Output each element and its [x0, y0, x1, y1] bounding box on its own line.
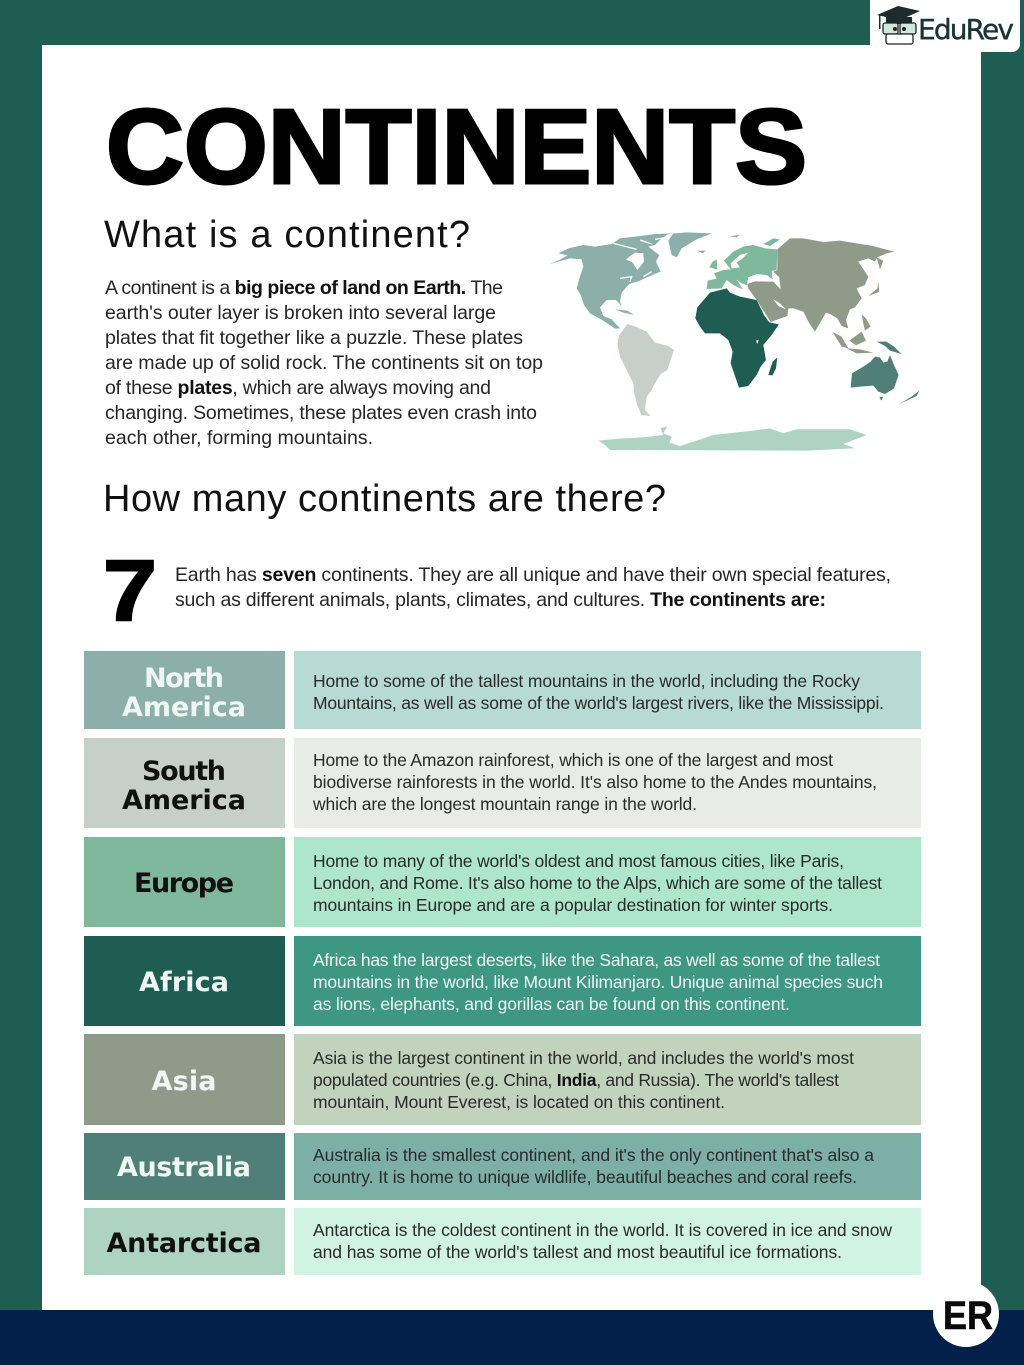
- logo: EduRev: [870, 0, 1020, 52]
- north america: [549, 232, 712, 329]
- row: North America: North: [144, 663, 224, 694]
- text block: seven continents intro: Earth has seven continents. They are all unique and have their own special features,: [175, 564, 891, 586]
- text block: seven continents intro: such as different animals, plants, climates, and cultures. The continents are:: [175, 589, 826, 611]
- row: Europe: mountains in Europe and are a popular destination for winter sports.: [313, 895, 833, 915]
- row: Australia: [84, 1133, 921, 1200]
- row: Africa: Africa has the largest deserts, like the Sahara, as well as some of the tallest: [313, 950, 880, 970]
- row: Europe: Home to many of the world's oldest and most famous cities, like Paris,: [313, 851, 844, 871]
- title: CONTINENTS: [106, 88, 807, 206]
- text block: continent definition: plates that fit together like a puzzle. These plates: [105, 327, 523, 349]
- world map: [549, 232, 919, 451]
- row: South America: biodiverse rainforests in the world. It's also home to the Andes mountains,: [313, 772, 877, 792]
- row: Africa: mountains in the world, like Mount Kilimanjaro. Unique animal species such: [313, 972, 883, 992]
- row: Europe: [84, 837, 921, 927]
- row: Africa: as lions, elephants, and gorillas can be found on this continent.: [313, 994, 790, 1014]
- text block: continent definition: changing. Sometimes, these plates even crash into: [105, 402, 537, 424]
- row: Europe: London, and Rome. It's also home to the Alps, which are some of the tallest: [313, 873, 882, 893]
- row: Antarctica: and has some of the world's tallest and most beautiful ice formations.: [313, 1242, 842, 1262]
- row: North America: America: [122, 692, 246, 723]
- row: Antarctica: Antarctica is the coldest continent in the world. It is covered in ice and snow: [313, 1220, 892, 1240]
- row: South America: South: [142, 756, 226, 787]
- text block: continent definition: each other, forming mountains.: [105, 427, 373, 449]
- logo: EduRev: EduRev: [918, 13, 1014, 46]
- row: South America: Home to the Amazon rainforest, which is one of the largest and most: [313, 750, 833, 770]
- row: Australia: Australia: [117, 1152, 251, 1183]
- text block: continent definition: earth's outer layer is broken into several large: [105, 302, 496, 324]
- text block: continent definition: of these plates, which are always moving and: [105, 377, 491, 399]
- row: North America: [84, 651, 921, 729]
- africa: [695, 288, 779, 388]
- row: Asia: populated countries (e.g. China, India, and Russia). The world's tallest: [313, 1070, 839, 1090]
- heading: what is a continent: What is a continent?: [104, 214, 470, 256]
- text block: continent definition: are made up of solid rock. The continents sit on top: [105, 352, 543, 374]
- row: North America: Mountains, as well as some of the world's largest rivers, like the Mississippi.: [313, 693, 884, 713]
- south america: [617, 324, 674, 416]
- asia: [747, 238, 894, 353]
- row: Asia: Asia is the largest continent in the world, and includes the world's most: [313, 1048, 854, 1068]
- row: Australia: Australia is the smallest continent, and it's the only continent that's also a: [313, 1145, 874, 1165]
- row: South America: America: [122, 785, 246, 816]
- row: Africa: Africa: [139, 967, 229, 998]
- europe: [707, 235, 780, 289]
- row: Asia: mountain, Mount Everest, is located on this continent.: [313, 1092, 725, 1112]
- row: South America: which are the longest mountain range in the world.: [312, 794, 697, 814]
- text block: seven continents intro: [175, 564, 891, 611]
- row: Europe: Europe: [134, 868, 234, 899]
- australia: [851, 342, 919, 404]
- text block: continent definition: A continent is a big piece of land on Earth. The: [105, 277, 503, 299]
- text block: continent definition: [105, 277, 543, 449]
- row: North America: Home to some of the tallest mountains in the world, including the Rocky: [313, 671, 860, 691]
- number seven: 7: [103, 543, 157, 639]
- heading: how many continents: How many continents are there?: [103, 478, 666, 520]
- row: Antarctica: Antarctica: [106, 1228, 262, 1259]
- badge: ER: [933, 1281, 999, 1347]
- badge: ER: ER: [943, 1294, 993, 1338]
- row: Asia: [84, 1034, 921, 1125]
- row: Antarctica: [84, 1208, 921, 1275]
- row: Asia: Asia: [152, 1066, 216, 1097]
- antarctica: [598, 426, 867, 451]
- row: South America: [84, 738, 921, 828]
- row: Australia: country. It is home to unique wildlife, beautiful beaches and coral reefs.: [313, 1167, 857, 1187]
- row: Africa: [84, 936, 921, 1026]
